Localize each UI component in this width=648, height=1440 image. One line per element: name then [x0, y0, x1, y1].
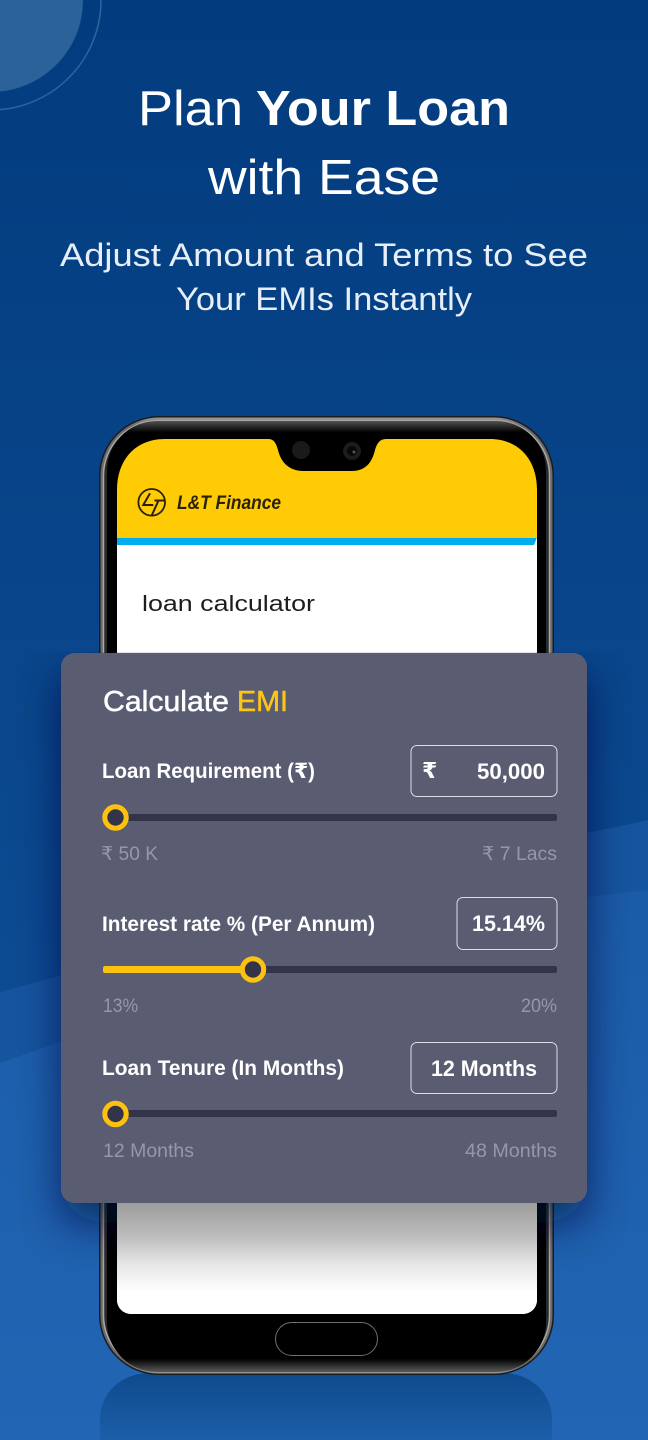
- card shadow: [61, 653, 587, 1203]
- decorative corner circle: [0, 0, 101, 110]
- range labels: 13%: [103, 996, 138, 1017]
- input: interest rate: [457, 898, 557, 950]
- title: [138, 82, 510, 205]
- title: Your Loan: [256, 82, 510, 136]
- input: loan amount: 50,000: [477, 759, 545, 784]
- notch speaker and camera: [292, 441, 361, 460]
- input: interest rate: 15.14%: [472, 911, 545, 936]
- range labels: [103, 1141, 557, 1162]
- slider: interest rate: [103, 959, 557, 980]
- slider: tenure: [103, 1103, 557, 1125]
- phone screen: [117, 537, 537, 1314]
- input: tenure: [411, 1042, 557, 1094]
- subtitle: Your EMIs Instantly: [176, 281, 472, 317]
- range labels: 20%: [521, 996, 557, 1017]
- subtitle: [60, 237, 588, 317]
- screen heading: loan calculator: [142, 591, 315, 616]
- interest rate row: Interest rate % (Per Annum): [102, 913, 375, 936]
- card heading: [103, 686, 288, 718]
- range labels: ₹ 50 K: [101, 844, 158, 865]
- title: with Ease: [207, 151, 440, 205]
- loan tenure row: [102, 1042, 557, 1162]
- range labels: [103, 996, 557, 1017]
- slider: loan amount: [103, 807, 557, 828]
- phone: [99, 416, 554, 1375]
- interest rate row: [102, 898, 557, 1017]
- range labels: ₹ 7 Lacs: [482, 844, 557, 865]
- range labels: 48 Months: [465, 1141, 557, 1162]
- L&T Finance wordmark: L&T Finance: [177, 492, 281, 514]
- input: loan amount: ₹: [422, 758, 437, 783]
- title: Plan: [138, 82, 243, 136]
- card background: [61, 653, 587, 1203]
- loan tenure row: Loan Tenure (In Months): [102, 1057, 344, 1080]
- home button: [276, 1322, 378, 1356]
- loan requirement row: [101, 746, 557, 865]
- panel: calculate EMI: [61, 653, 587, 1203]
- reflection of phone: [100, 1373, 552, 1440]
- loan requirement row: Loan Requirement (₹): [102, 760, 315, 783]
- card heading: EMI: [237, 686, 288, 718]
- input: tenure: 12 Months: [431, 1056, 537, 1081]
- range labels: [101, 844, 557, 865]
- input: loan amount: [411, 746, 557, 796]
- range labels: 12 Months: [103, 1141, 194, 1162]
- phone body: [99, 416, 554, 1375]
- subtitle: Adjust Amount and Terms to See: [60, 237, 588, 273]
- yellow app header: [117, 439, 537, 545]
- L&T logo: [138, 489, 165, 516]
- screen shade below card: [117, 1203, 537, 1314]
- card heading: Calculate: [103, 686, 229, 718]
